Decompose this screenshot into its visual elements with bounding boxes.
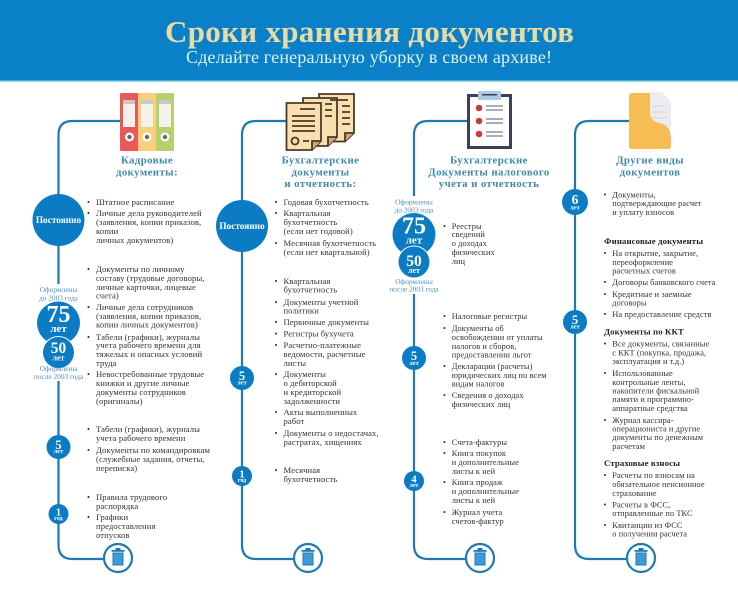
text block: 75 years: Личные дела сотрудников: [96, 302, 193, 312]
badge: 6 years: [562, 189, 588, 215]
text block: 5 years: •: [274, 317, 278, 327]
text block: постоянно: Месячная бухотчетность: [284, 238, 376, 248]
badge: 4 years: лет: [410, 483, 419, 489]
text block: финансовые документы: Договоры банковского счета: [612, 278, 716, 287]
text block: постоянно: [87, 197, 202, 245]
heading: документы:: [116, 166, 178, 178]
text block: 5 years: •: [274, 407, 278, 417]
text block: 5 years: •: [87, 445, 90, 455]
badge: 1 year: 1: [56, 508, 61, 518]
text block: 75 years: Невостребованные трудовые: [96, 369, 204, 379]
text block: постоянно: (если нет годовой): [284, 226, 353, 236]
badge: 5 years: 5: [239, 369, 245, 383]
text block: 75 years: Реестры: [452, 222, 482, 231]
text block: 75 years: документы сотрудников: [96, 387, 186, 397]
text block: 75 years: учета рабочего времени для: [96, 340, 201, 350]
text block: 1 year: •: [87, 512, 90, 522]
text block: финансовые документы: •: [604, 278, 607, 287]
text block: 75 years: •: [87, 369, 90, 379]
text block: 5 years: растратах, хищениях: [284, 437, 362, 447]
badge: 75 and 50 years: 75: [46, 302, 70, 328]
text block: 1 year: предоставления: [96, 521, 156, 531]
text block: финансовые документы: расчетных счетов: [612, 266, 676, 276]
text block: 5 years: листы: [284, 358, 306, 368]
text block: документы по ККТ: Использованные: [612, 369, 673, 378]
text block: финансовые документы: переоформление: [612, 258, 673, 267]
badge: 5 years: [230, 366, 254, 390]
heading: документов: [620, 166, 680, 178]
badge: 4 years: 4: [411, 474, 417, 486]
heading: Бухгалтерские: [450, 154, 528, 166]
text block: 5 years: [443, 312, 547, 409]
timeline line 3: [414, 121, 467, 559]
text block: 1 year: отпусков: [96, 530, 130, 540]
badge: 6 years: лет: [570, 204, 581, 212]
text block: 75 years: составу (трудовые договоры,: [96, 273, 204, 283]
text block: 5 years: физических лиц: [452, 400, 511, 409]
text block: 5 years: Документы учетной: [284, 297, 359, 307]
heading: учета и отчетность: [439, 178, 539, 190]
text block: 4 years: Счета-фактуры: [452, 438, 507, 447]
text block: страховые взносы: Расчеты в ФСС,: [612, 500, 670, 510]
text block: 6 years: [604, 190, 702, 217]
icon: trash: [104, 544, 132, 572]
title: Сроки хранения документов: [165, 14, 574, 49]
text block: 5 years: учета рабочего времени: [96, 433, 186, 443]
text block: страховые взносы: о получении расчета: [612, 530, 687, 538]
text block: финансовые документы: Кредитные и заемные: [612, 290, 692, 299]
text block: 75 years: [443, 222, 496, 266]
badge: 1 year: год: [54, 516, 63, 522]
text block: 75 years: счета): [96, 290, 119, 300]
text block: 75 years: труда: [96, 358, 117, 368]
text block: 5 years: •: [443, 324, 446, 333]
badge: 5 years: лет: [409, 360, 420, 367]
text block: страховые взносы: •: [604, 500, 607, 510]
text block: 5 years: •: [443, 391, 446, 400]
icon: folder with document: [629, 92, 671, 149]
text block: финансовые документы: [604, 236, 716, 319]
badge: 75 and 50 years: [34, 285, 84, 381]
badge: 1 year: [48, 504, 68, 524]
badge: 75 and 50 years: Оформлены: [395, 198, 433, 206]
heading: [616, 154, 684, 178]
text block: 4 years: листы к ней: [452, 496, 496, 505]
badge: 75 and 50 years: до 2003 года: [39, 294, 79, 302]
text block: документы по ККТ: [604, 326, 709, 451]
text block: постоянно: •: [274, 238, 278, 248]
text block: 1 year: распорядка: [96, 501, 138, 511]
text block: 5 years: [274, 276, 379, 447]
timeline line 2: [242, 121, 294, 559]
text block: 75 years: •: [87, 302, 90, 312]
text block: 5 years: •: [87, 424, 90, 434]
text block: постоянно: •: [274, 197, 278, 207]
text block: 5 years: •: [443, 312, 446, 321]
heading: Кадровые: [121, 154, 173, 166]
badge: 1 year: [232, 466, 252, 486]
text block: документы по ККТ: аппаратные средства: [612, 404, 688, 413]
text block: 5 years: Документы об: [452, 324, 504, 333]
heading: документы: [291, 166, 350, 178]
text block: 5 years: Налоговые регистры: [452, 312, 528, 321]
text block: документы по ККТ: расчетам: [612, 442, 646, 451]
text block: финансовые документы: •: [604, 249, 607, 258]
text block: постоянно: (заявления, копии приказов,: [96, 217, 201, 227]
text block: 1 year: [87, 492, 167, 540]
panel: кадровые документы: [32, 93, 211, 572]
text block: страховые взносы: Страховые взносы: [604, 458, 680, 468]
badge: 75 and 50 years: лет: [406, 234, 423, 246]
heading: [282, 154, 359, 190]
text block: 5 years: •: [274, 276, 278, 286]
text block: 1 year: Графики: [96, 512, 128, 522]
text block: документы по ККТ: памяти и программно-: [612, 395, 694, 404]
text block: 1 year: •: [87, 492, 90, 502]
text block: постоянно: [274, 197, 376, 257]
text block: 5 years: Сведения о доходах: [452, 391, 524, 400]
text block: 5 years: ведомости, расчетные: [284, 349, 366, 359]
text block: 5 years: предоставлении льгот: [452, 350, 532, 360]
text block: 5 years: •: [274, 428, 278, 438]
text block: 5 years: Декларации (расчеты): [452, 362, 533, 371]
heading: Бухгалтерские: [282, 154, 359, 166]
text block: документы по ККТ: документы по денежным: [612, 433, 704, 442]
text block: постоянно: Квартальная: [284, 208, 330, 218]
text block: 5 years: о дебиторской: [284, 378, 337, 388]
icon: trash: [294, 544, 322, 572]
text block: документы по ККТ: •: [604, 340, 607, 348]
text block: 5 years: [87, 424, 211, 473]
text block: 75 years: личные карточки, лицевые: [96, 282, 196, 292]
text block: 6 years: подтверждающие расчет: [612, 199, 702, 208]
text block: 75 years: физических: [452, 248, 496, 257]
text block: постоянно: (если нет квартальной): [284, 247, 370, 257]
badge: 75 and 50 years: Оформлены: [395, 277, 433, 286]
text block: 5 years: освобождении от уплаты: [452, 333, 543, 342]
text block: 75 years: [87, 264, 204, 406]
text block: финансовые документы: •: [604, 310, 607, 319]
badge: 75 and 50 years: 50: [51, 340, 66, 357]
text block: 75 years: •: [87, 264, 90, 274]
badge: 5 years: 5: [55, 438, 62, 452]
text block: 75 years: •: [87, 332, 90, 342]
text block: 5 years: Регистры бухучета: [284, 328, 354, 338]
text block: 75 years: тяжелых и опасных условий: [96, 349, 202, 359]
text block: 1 year: Месячная: [284, 465, 320, 475]
text block: 1 year: •: [274, 465, 278, 475]
badge: 5 years: [402, 346, 426, 370]
text block: 4 years: Книга продаж: [452, 478, 503, 487]
text block: 6 years: и уплату взносов: [612, 208, 674, 217]
badge: 75 and 50 years: Оформлены: [40, 285, 77, 294]
text block: 75 years: Табели (графики), журналы: [96, 332, 200, 342]
text block: 5 years: политики: [284, 306, 319, 316]
timeline line 4: [575, 121, 630, 559]
badge: 75 and 50 years: 50: [406, 253, 422, 270]
text block: 5 years: •: [274, 369, 278, 379]
text block: страховые взносы: [604, 458, 705, 538]
text block: 75 years: (заявления, копии приказов,: [96, 311, 201, 321]
badge: 75 and 50 years: 75: [402, 214, 426, 240]
text block: 1 year: Правила трудового: [96, 492, 167, 502]
text block: документы по ККТ: Все документы, связанные: [612, 340, 709, 348]
text block: страховые взносы: обязательное пенсионное: [612, 480, 705, 489]
heading: и отчетность:: [284, 178, 357, 190]
text block: 4 years: •: [443, 508, 446, 517]
text block: 5 years: видам налогов: [452, 380, 505, 388]
text block: 75 years: о доходах: [452, 239, 488, 248]
badge: 75 and 50 years: до 2003 года: [395, 206, 434, 214]
badge: постоянно: [32, 194, 84, 246]
panel: бухгалтерские документы: [216, 94, 379, 572]
text block: 75 years: (оригиналы): [96, 396, 143, 406]
badge: 75 and 50 years: после 2003 года: [34, 372, 84, 381]
badge: 75 and 50 years: после 2003 года: [389, 284, 439, 294]
text block: 5 years: Документы по командировкам: [96, 445, 211, 455]
text block: 5 years: и кредиторской: [284, 387, 342, 397]
text block: постоянно: •: [274, 208, 278, 218]
text block: документы по ККТ: с ККТ (покупка, продажа,: [612, 348, 706, 358]
badge: постоянно: Постоянно: [36, 216, 82, 226]
badge: 5 years: лет: [237, 380, 248, 386]
text block: 5 years: работ: [284, 416, 304, 426]
badge: 5 years: 5: [572, 313, 578, 327]
text block: 6 years: Документы,: [612, 190, 656, 200]
text block: постоянно: Личные дела руководителей: [96, 208, 202, 218]
text block: 5 years: Табели (графики), журналы: [96, 424, 200, 434]
text block: 4 years: •: [443, 478, 446, 487]
text block: 5 years: Документы о недостачах,: [284, 428, 379, 438]
text block: 4 years: листы к ней: [452, 467, 496, 476]
badge: 75 and 50 years: лет: [408, 266, 420, 275]
icon: paper sheets: [286, 94, 354, 150]
text block: 5 years: Квартальная: [284, 276, 330, 286]
text block: документы по ККТ: эксплуатация и т.д.): [612, 357, 684, 366]
icon: clipboard: [468, 91, 510, 148]
badge: постоянно: Постоянно: [219, 222, 265, 232]
heading: [428, 154, 550, 190]
text block: 75 years: лиц: [452, 257, 466, 266]
text block: финансовые документы: Финансовые документы: [604, 236, 703, 246]
text block: 75 years: Документы по личному: [96, 264, 185, 274]
text block: документы по ККТ: Документы по ККТ: [604, 326, 684, 336]
heading: Документы налогового: [428, 166, 550, 178]
badge: 75 and 50 years: лет: [53, 354, 65, 362]
text block: страховые взносы: Квитанции из ФСС: [612, 521, 683, 530]
badge: 5 years: [563, 310, 587, 334]
text block: документы по ККТ: Журнал кассира-: [612, 416, 674, 425]
text block: постоянно: копии: [96, 226, 119, 236]
text block: страховые взносы: Расчеты по взносам на: [612, 471, 695, 480]
text block: 5 years: бухотчетность: [284, 284, 337, 294]
icon: trash: [466, 544, 494, 572]
text block: 5 years: •: [443, 362, 446, 371]
text block: 75 years: книжки и другие личные: [96, 378, 190, 388]
text block: 5 years: Акты выполненных: [284, 407, 358, 417]
heading: Другие виды: [616, 154, 684, 166]
text block: документы по ККТ: операциониста и другие: [612, 424, 700, 434]
badge: 4 years: [404, 471, 424, 491]
text block: 4 years: •: [443, 438, 446, 447]
badge: 75 and 50 years: [389, 198, 439, 294]
icon: trash: [627, 544, 655, 572]
badge: 5 years: лет: [54, 448, 64, 455]
text block: документы по ККТ: •: [604, 416, 607, 425]
text block: 4 years: •: [443, 449, 446, 458]
text block: 5 years: •: [274, 340, 278, 350]
header band: [0, 0, 738, 82]
text block: 5 years: (служебные задания, отчеты,: [96, 454, 205, 464]
text block: постоянно: личных документов): [96, 235, 173, 245]
text block: постоянно: бухотчетность: [284, 217, 337, 227]
text block: документы по ККТ: •: [604, 369, 607, 378]
badge: 5 years: [46, 435, 70, 459]
text block: 5 years: задолженности: [284, 396, 340, 406]
timeline line 1: [58, 121, 120, 559]
text block: постоянно: •: [87, 208, 90, 218]
badge: 6 years: 6: [572, 192, 579, 207]
text block: постоянно: •: [87, 197, 90, 207]
text block: страховые взносы: отправленные по ТКС: [612, 509, 693, 518]
text block: финансовые документы: договоры: [612, 298, 647, 308]
subtitle: Сделайте генеральную уборку в своем архиве!: [186, 47, 552, 67]
badge: 1 year: год: [238, 478, 246, 484]
icon: binders: [120, 93, 174, 151]
text block: 5 years: налогов и сборов,: [452, 342, 516, 351]
panel: налоговый учет: [389, 91, 550, 572]
text block: 1 year: [274, 465, 337, 484]
text block: 5 years: •: [274, 297, 278, 307]
badge: 75 and 50 years: лет: [50, 323, 67, 335]
text block: 4 years: [443, 438, 519, 526]
text block: финансовые документы: •: [604, 290, 607, 299]
text block: страховые взносы: страхование: [612, 489, 657, 498]
text block: 5 years: Документы: [284, 369, 326, 379]
text block: 5 years: Расчетно-платежные: [284, 340, 361, 350]
text block: 5 years: •: [274, 328, 278, 338]
panel: другие виды документов: [562, 92, 716, 572]
heading: [116, 154, 178, 178]
text block: 5 years: переписка): [96, 463, 137, 473]
text block: 5 years: юридических лиц по всем: [452, 371, 547, 380]
text block: 5 years: Первичные документы: [284, 317, 369, 327]
text block: постоянно: Штатное расписание: [96, 197, 175, 207]
badge: 75 and 50 years: Оформлены: [40, 364, 77, 373]
text block: документы по ККТ: контрольные ленты,: [612, 378, 686, 387]
text block: 4 years: Журнал учета: [452, 508, 502, 517]
text block: страховые взносы: •: [604, 471, 607, 480]
text block: постоянно: Годовая бухотчетность: [284, 197, 369, 207]
text block: 75 years: •: [443, 222, 446, 231]
badge: 5 years: лет: [570, 324, 581, 330]
text block: документы по ККТ: накопители фискальной: [612, 386, 700, 396]
text block: 4 years: и дополнительные: [452, 458, 519, 467]
badge: 5 years: 5: [411, 349, 417, 363]
text block: страховые взносы: •: [604, 521, 607, 530]
text block: 1 year: бухотчетность: [284, 474, 337, 484]
text block: финансовые документы: На предоставление средств: [612, 310, 712, 319]
text block: финансовые документы: На открытие, закрытие,: [612, 249, 698, 258]
text block: 4 years: счетов-фактур: [452, 517, 504, 526]
text block: 4 years: и дополнительные: [452, 487, 519, 496]
badge: постоянно: [216, 200, 268, 252]
text block: 75 years: копии личных документов): [96, 320, 198, 330]
text block: 6 years: •: [604, 190, 607, 200]
text block: 4 years: Книга покупок: [452, 449, 507, 458]
badge: 1 year: 1: [239, 470, 245, 480]
text block: 75 years: сведений: [452, 230, 485, 239]
